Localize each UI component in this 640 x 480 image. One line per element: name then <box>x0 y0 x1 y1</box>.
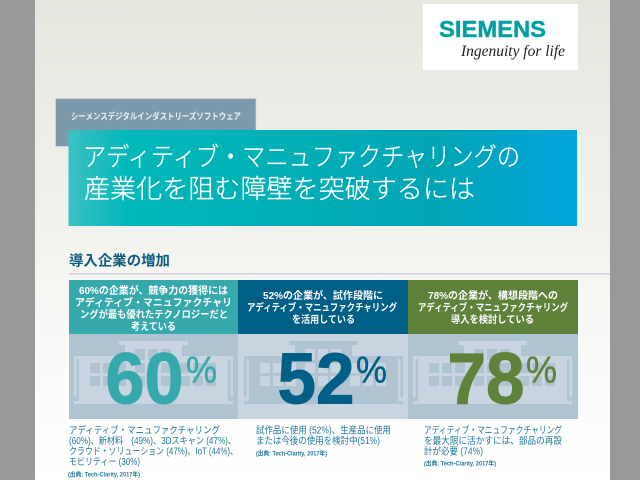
title banner: 産業化を阻む障壁を突破するには <box>84 174 475 204</box>
description: 60%: モビリティー (30%) <box>69 456 140 468</box>
logo: Siemens <box>423 4 578 70</box>
header: 60%: 60%の企業が、競争力の獲得には <box>79 284 228 297</box>
stat: 78% over building <box>408 334 578 420</box>
label box: Siemens Digital Industries Software <box>56 98 256 146</box>
title banner: アディティブ・マニュファクチャリングの <box>83 142 520 172</box>
logo: Siemens: SIEMENS <box>439 16 546 42</box>
header: 52%: アディティブ・マニュファクチャリング <box>247 301 397 314</box>
header: 52%: を活用している <box>292 313 355 326</box>
header: 60%: アディティブ・マニュファクチャリ <box>75 296 232 309</box>
header: 78%: 78%の企業が、構想段階への <box>428 289 558 302</box>
header: 78%: アディティブ・マニュファクチャリング <box>418 301 568 314</box>
header: 52% <box>238 280 408 334</box>
description: 78%: 計が必要 (74%) <box>424 445 483 458</box>
description: 60%: (60%)、新材料 (49%)、3Dスキャン (47%)、 <box>69 434 236 447</box>
header: 60%: ングが最も優れたテクノロジーだと <box>80 308 228 321</box>
header: 52%: 52%の企業が、試作段階に <box>263 289 383 302</box>
stat: 60% over building <box>69 334 238 420</box>
description: 52%: 試作品に使用 (52%)、生産品に使用 <box>256 424 391 437</box>
description: 52%: または今後の使用を検討中(51%) <box>256 434 380 447</box>
description: 52%: (出典: Tech-Clarity, 2017年) <box>256 450 327 458</box>
stat: 60% over building: % <box>186 350 217 390</box>
stat: 52% over building: % <box>356 350 387 390</box>
panel: 60% <box>68 280 238 478</box>
description: 78%: (出典: Tech-Clarity, 2017年) <box>424 460 496 468</box>
stat: 78% over building: 78 <box>448 340 524 420</box>
stat: 78% over building: % <box>526 350 557 390</box>
section heading: 導入企業の増加 <box>69 252 170 270</box>
description: 78% <box>424 424 562 468</box>
description: 60%: クラウド・ソリューション (47%)、IoT (44%)、 <box>69 446 238 458</box>
stat: 52% over building <box>238 334 408 420</box>
stat: 60% over building: 60 <box>106 340 184 420</box>
stat: 52% over building: 52 <box>278 340 354 420</box>
header: 78%: 導入を検討している <box>451 313 534 326</box>
description: 78%: アディティブ・マニュファクチャリング <box>424 424 562 437</box>
description: 52% <box>256 424 391 458</box>
title banner <box>68 130 577 226</box>
header: 78% <box>408 280 578 334</box>
description: 60% <box>68 424 238 478</box>
header: 60% <box>69 280 238 334</box>
header: 60%: 考えている <box>131 320 176 333</box>
panel: 78% <box>408 280 578 468</box>
description: 78%: を最大限に活かすには、部品の再設 <box>424 434 562 447</box>
description: 60%: (出典: Tech-Clarity, 2017年) <box>68 470 140 478</box>
panel: 52% <box>238 280 408 458</box>
label box: Siemens Digital Industries Software: シーメンスデジタルインダストリーズソフトウェア <box>71 110 241 122</box>
logo: Siemens: Ingenuity for life <box>460 43 565 60</box>
description: 60%: アディティブ・マニュファクチャリング <box>69 424 220 437</box>
